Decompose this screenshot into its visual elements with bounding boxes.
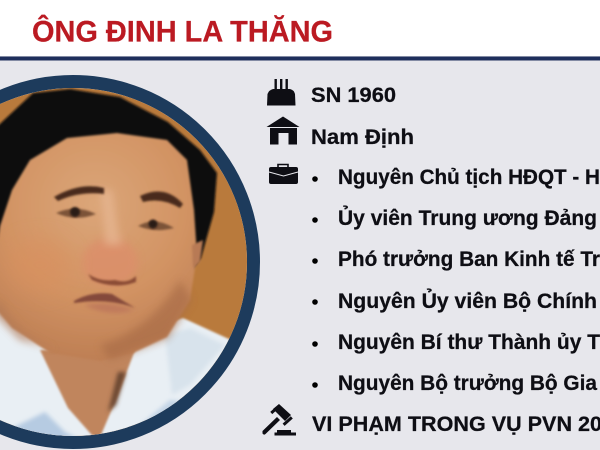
- icon: gavel: [262, 404, 296, 436]
- ear: [192, 240, 203, 268]
- flushed cheeks and nose: [86, 242, 132, 274]
- eyebrows: [54, 186, 104, 201]
- career list: [312, 166, 600, 395]
- nose shadow: [88, 274, 136, 286]
- career list: Nguyên Chủ tịch HĐQT - H: [338, 166, 600, 189]
- violation heading: VI PHẠM TRONG VỤ PVN 20: [312, 413, 600, 436]
- hair: [0, 89, 217, 275]
- career list: Nguyên Bộ trưởng Bộ Gia: [338, 372, 597, 395]
- eyes: [56, 209, 96, 218]
- icon: briefcase: [269, 164, 298, 184]
- career list: Ủy viên Trung ương Đảng: [338, 206, 597, 230]
- title: ÔNG ĐINH LA THĂNG: [32, 14, 333, 48]
- icon: birth cake: [267, 79, 296, 106]
- career list: Phó trưởng Ban Kinh tế Tr: [338, 248, 600, 271]
- hometown: Nam Định: [311, 126, 414, 149]
- portrait: [0, 80, 254, 450]
- birth year: SN 1960: [311, 84, 396, 107]
- jaw shading: [103, 282, 190, 358]
- neck: [40, 350, 135, 442]
- career list: Nguyên Ủy viên Bộ Chính: [338, 289, 597, 313]
- mouth: [74, 293, 135, 308]
- career list: Nguyên Bí thư Thành ủy T: [338, 331, 600, 354]
- shirt: [0, 312, 230, 436]
- face: [0, 133, 197, 361]
- icon: home: [266, 116, 300, 144]
- header band: [0, 0, 600, 56]
